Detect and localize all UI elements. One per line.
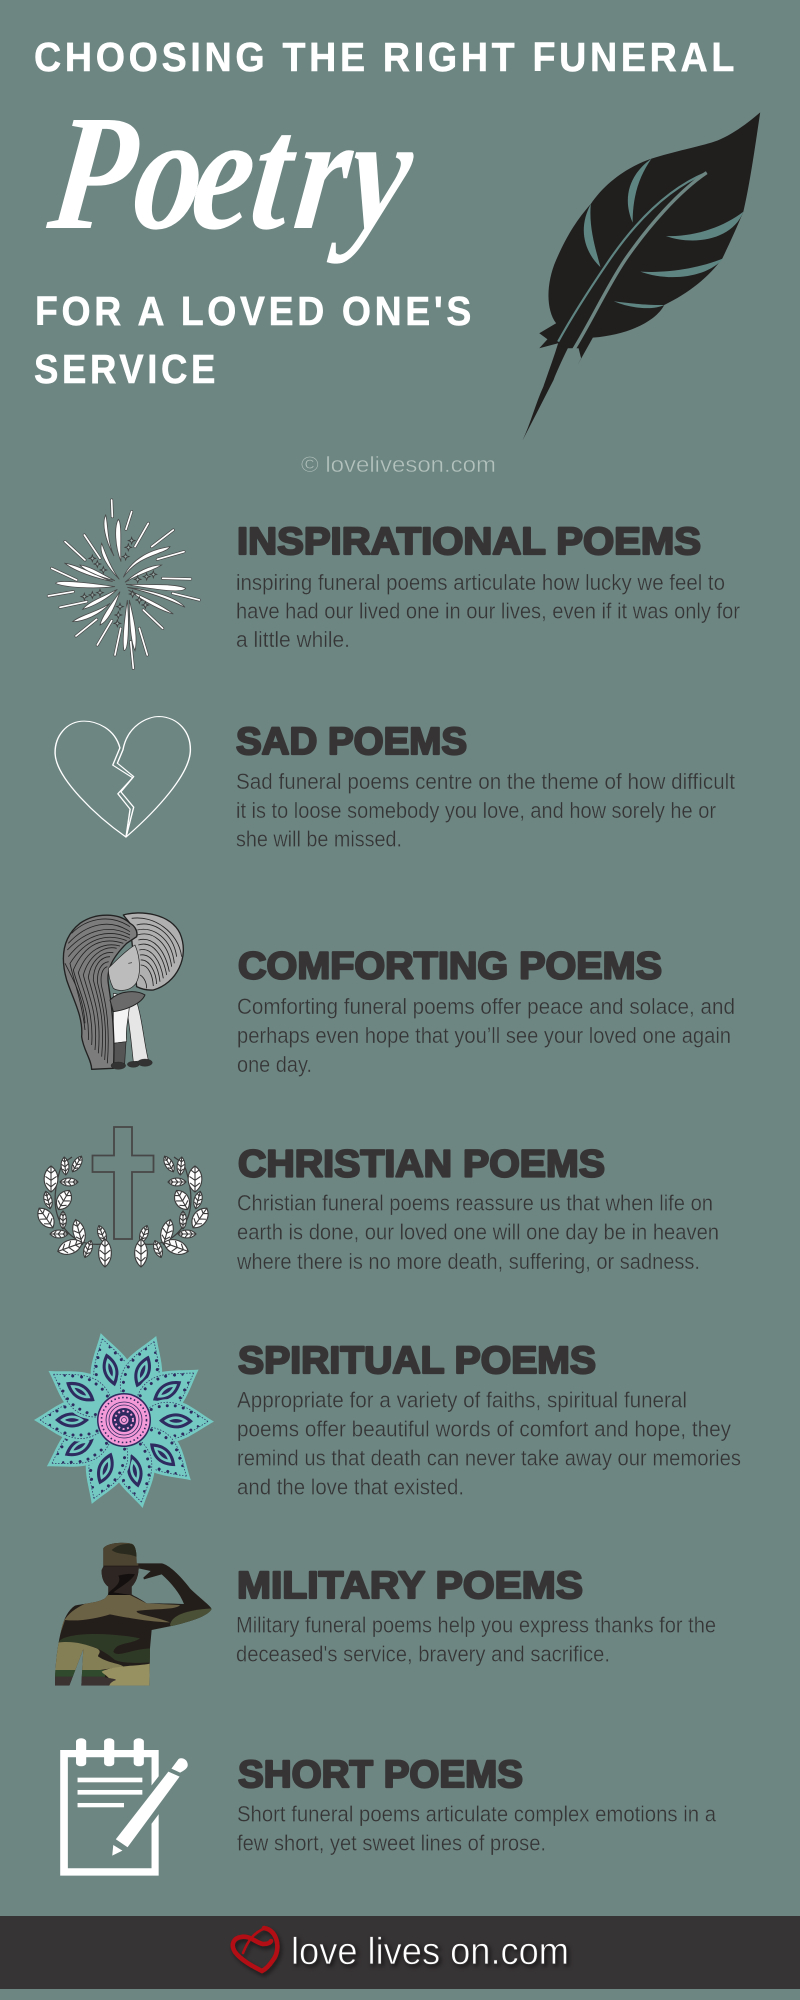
icon: mandala flower	[34, 1327, 214, 1513]
description: remind us that death can never take away our memories	[237, 1446, 741, 1471]
panel: short	[60, 1738, 717, 1876]
description	[236, 1613, 716, 1667]
heading: CHRISTIAN POEMS	[238, 1144, 605, 1186]
heading: SHORT POEMS	[238, 1754, 523, 1796]
description: perhaps even hope that you’ll see your loved one again	[237, 1023, 731, 1048]
heading line 2: FOR A LOVED ONE'S	[35, 288, 475, 334]
panel: sad	[55, 717, 735, 852]
description: inspiring funeral poems articulate how lucky we feel to	[236, 570, 725, 595]
icon: notepad and pencil	[60, 1738, 188, 1876]
description	[237, 1388, 741, 1500]
description: few short, yet sweet lines of prose.	[237, 1831, 546, 1856]
heading: MILITARY POEMS	[237, 1565, 583, 1607]
heading line 1: CHOOSING THE RIGHT FUNERAL	[34, 34, 738, 80]
panel: comforting	[63, 913, 735, 1077]
heading: SAD POEMS	[236, 721, 467, 763]
description: Comforting funeral poems offer peace and solace, and	[237, 994, 735, 1019]
description	[236, 1191, 719, 1274]
description: where there is no more death, suffering, or sadness.	[236, 1249, 700, 1274]
panel: military	[50, 1538, 716, 1688]
description: and the love that existed.	[237, 1475, 464, 1500]
script word Poetry: Poetry	[41, 81, 423, 264]
heading: SPIRITUAL POEMS	[238, 1340, 596, 1382]
heading: COMFORTING POEMS	[238, 946, 662, 988]
description: Short funeral poems articulate complex emotions in a	[237, 1802, 717, 1827]
icon: embracing couple	[63, 913, 183, 1069]
description	[237, 994, 735, 1077]
description	[236, 570, 740, 652]
icon: saluting soldier	[55, 1542, 212, 1686]
icon: cross and wreath	[34, 1127, 212, 1267]
description: Military funeral poems help you express thanks for the	[236, 1613, 716, 1638]
icon: broken heart	[55, 717, 190, 837]
description: deceased's service, bravery and sacrifice.	[236, 1642, 610, 1667]
wordmark: love lives on.com	[291, 1931, 569, 1973]
copyright: © loveliveson.com	[301, 452, 496, 477]
panel: christian	[34, 1127, 719, 1274]
description: Christian funeral poems reassure us that when life on	[237, 1191, 713, 1216]
icon: firework	[48, 500, 199, 668]
description: Appropriate for a variety of faiths, spiritual funeral	[237, 1388, 687, 1413]
description: Sad funeral poems centre on the theme of how difficult	[236, 769, 735, 794]
description: have had our lived one in our lives, even if it was only for	[236, 598, 740, 624]
description: it is to loose somebody you love, and how sorely he or	[236, 798, 716, 823]
footer bar	[0, 1916, 800, 1989]
icon: feather	[522, 112, 760, 441]
description	[236, 769, 735, 852]
heading: INSPIRATIONAL POEMS	[237, 521, 701, 563]
description	[237, 1802, 717, 1856]
panel: inspirational	[48, 500, 740, 668]
description: she will be missed.	[236, 827, 402, 852]
heading line 3: SERVICE	[34, 346, 219, 392]
description: poems offer beautiful words of comfort and hope, they	[237, 1417, 731, 1442]
description: a little while.	[236, 627, 350, 652]
panel: spiritual	[34, 1327, 741, 1513]
description: earth is done, our loved one will one day be in heaven	[237, 1220, 719, 1245]
title block	[34, 34, 738, 392]
icon: red heart logo	[233, 1928, 277, 1971]
description: one day.	[237, 1052, 312, 1077]
